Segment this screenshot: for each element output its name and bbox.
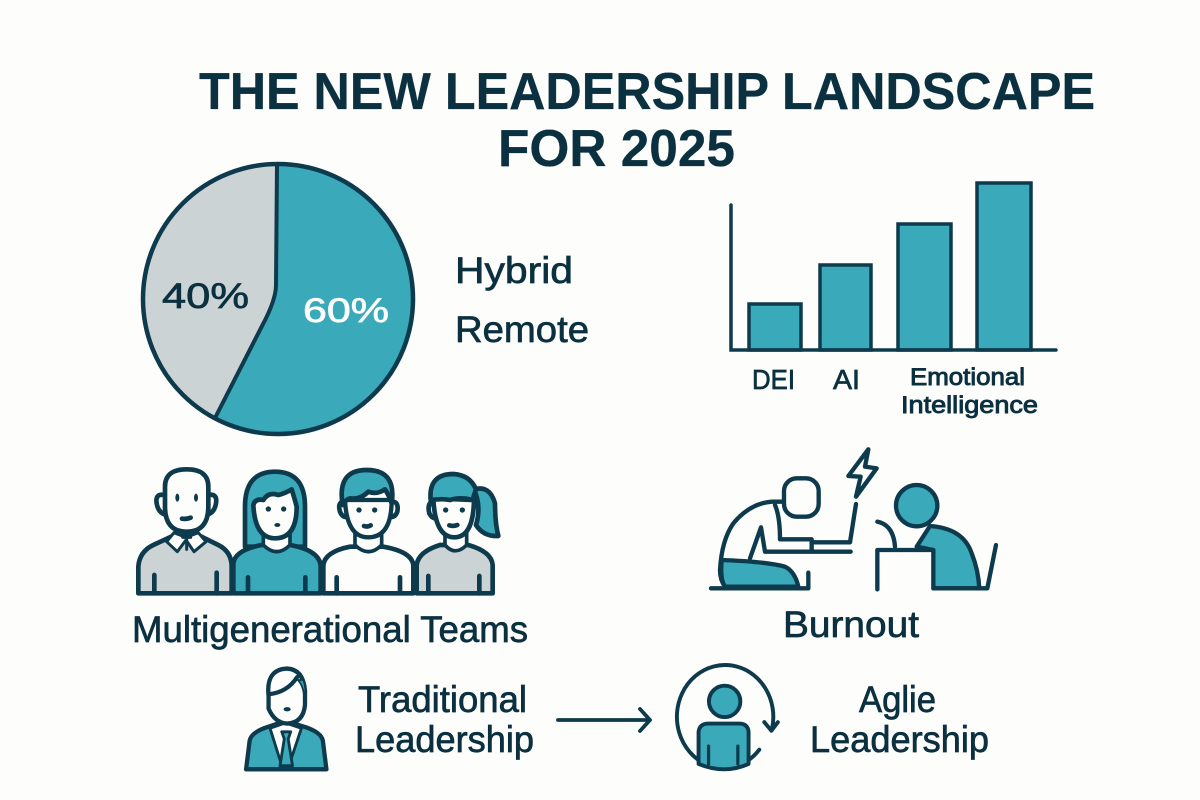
person: older man (138, 469, 232, 593)
label: traditional leadership: Leadership (355, 719, 534, 760)
title: THE NEW LEADERSHIP LANDSCAPE (199, 63, 1095, 121)
bar chart: leadership priorities: Emotional (910, 364, 1025, 391)
icon: burnout scene (711, 449, 996, 589)
pie chart: hybrid vs remote: 60% (303, 292, 389, 330)
arrow: traditional to agile (558, 709, 650, 731)
label: agile leadership: Aglie (859, 679, 936, 720)
icon: traditional leader (246, 669, 326, 769)
label: traditional leadership: Traditional (358, 679, 527, 720)
pie legend: Hybrid (455, 250, 573, 291)
icon: agile leader in cycle (677, 665, 778, 769)
person: woman with ponytail (417, 474, 498, 593)
person: woman with long hair (233, 472, 321, 593)
pie chart: hybrid vs remote (143, 164, 414, 434)
icon: multigenerational team (138, 469, 498, 593)
pie legend: Remote (455, 309, 589, 350)
colleague at desk (877, 485, 996, 589)
title: FOR 2025 (498, 120, 735, 178)
label: traditional leadership (355, 679, 534, 760)
icon: lightning bolt (848, 449, 877, 497)
bar chart: leadership priorities: AI (833, 364, 860, 395)
pie chart: hybrid vs remote: 40% (162, 277, 249, 316)
title (199, 63, 1095, 178)
bar chart: leadership priorities: DEI (752, 364, 795, 395)
person: young man (323, 470, 413, 593)
pie legend (455, 250, 589, 350)
label: agile leadership (810, 679, 989, 760)
label: multigenerational teams: Multigenerational Teams (132, 609, 528, 650)
bar chart: leadership priorities (731, 183, 1056, 419)
label: burnout: Burnout (783, 604, 920, 645)
label: agile leadership: Leadership (810, 719, 989, 760)
burned-out worker (711, 478, 856, 588)
bar chart: leadership priorities: Intelligence (901, 392, 1038, 419)
